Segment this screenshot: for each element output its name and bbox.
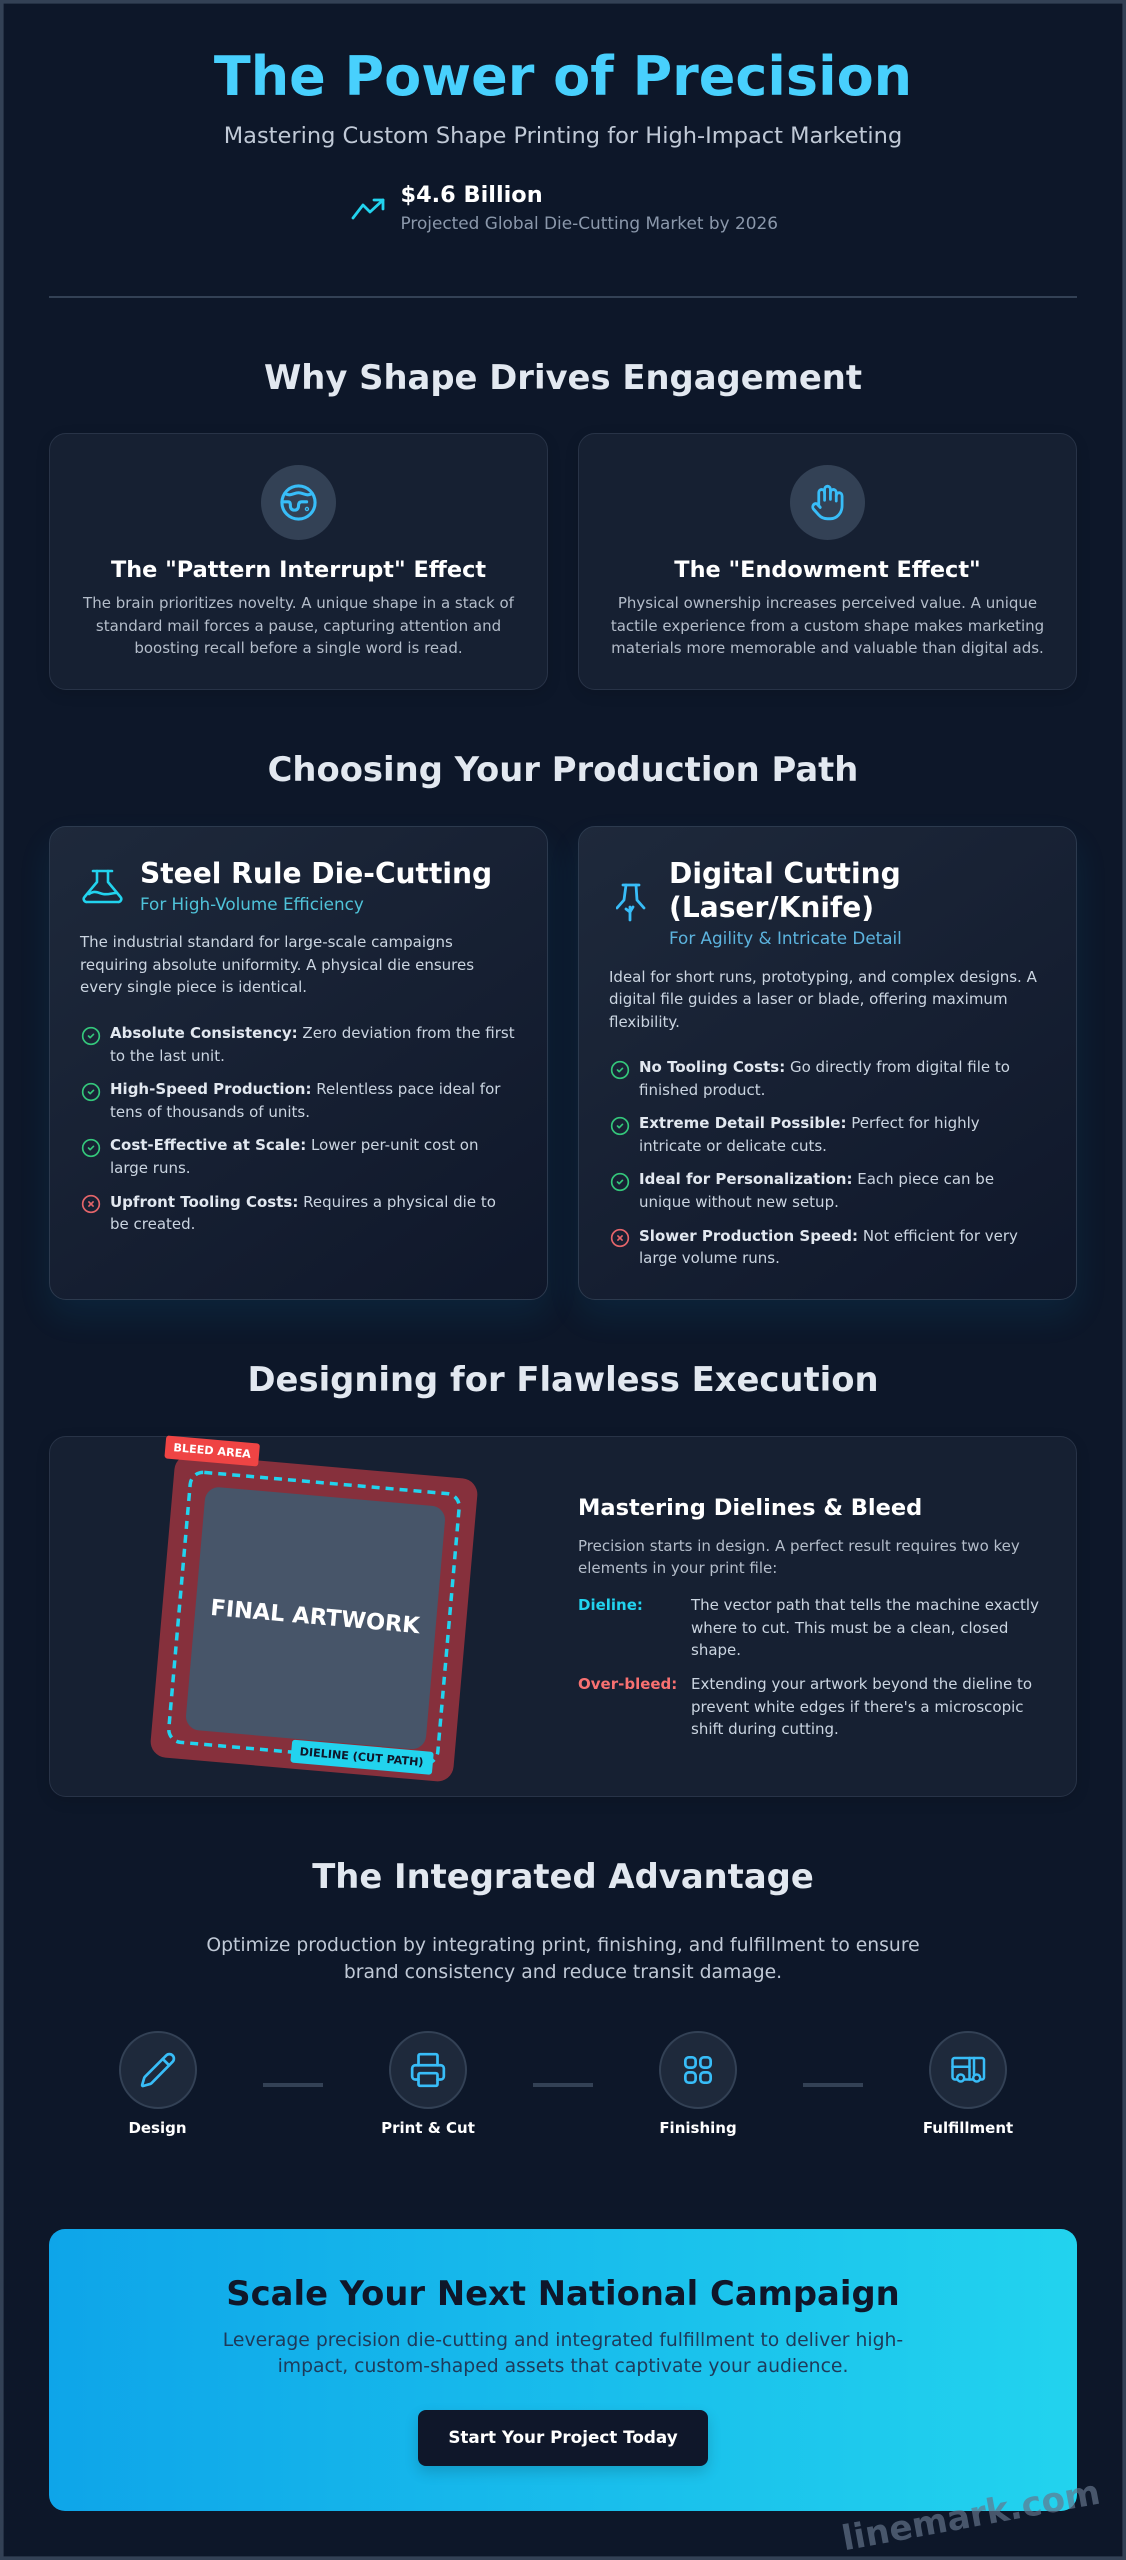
icon: check [82, 1082, 100, 1102]
card subtitle: For High-Volume Efficiency [140, 894, 364, 914]
item text: Upfront Tooling Costs: Requires a physical die to [110, 1193, 496, 1211]
cta text: impact, custom-shaped assets that captivate your audience. [278, 2356, 848, 2377]
icon: cross [610, 1228, 630, 1248]
dieline dashed path [167, 1470, 461, 1764]
item text: large runs. [110, 1159, 191, 1177]
label: Print & Cut [381, 2119, 475, 2137]
list item [610, 1058, 1010, 1098]
step: fulfillment [929, 2031, 1007, 2109]
card title: Digital Cutting [669, 857, 901, 890]
card title: The "Endowment Effect" [674, 557, 981, 583]
intro text [578, 1536, 1020, 1577]
icon: truck [949, 2051, 987, 2089]
intro paragraph: Optimize production by integrating print, finishing, and fulfillment to ensure [206, 1935, 920, 1956]
list item [610, 1114, 980, 1155]
icon: trending up [352, 198, 384, 220]
card description: requiring absolute uniformity. A physical die ensures [80, 956, 474, 974]
item text: Cost-Effective at Scale: Lower per-unit cost on [110, 1136, 478, 1154]
connector [533, 2083, 593, 2087]
market stat [352, 182, 778, 232]
panel: endowment effect [578, 433, 1077, 690]
cta button: Start Your Project Today [448, 2427, 678, 2447]
icon: check [82, 1026, 100, 1046]
item text [110, 1024, 515, 1064]
final artwork area [185, 1486, 446, 1750]
definition: dieline: The vector path that tells the machine exactly [691, 1596, 1039, 1614]
item text: be created. [110, 1215, 195, 1233]
bleed label [164, 1435, 260, 1466]
card description: The brain prioritizes novelty. A unique shape in a stack of [83, 594, 514, 612]
label: Design [128, 2119, 187, 2137]
stat caption: Projected Global Die-Cutting Market by 2026 [400, 212, 778, 232]
card title: (Laser/Knife) [669, 890, 874, 924]
card description [611, 594, 1044, 657]
step: design [118, 2031, 196, 2109]
intro paragraph [206, 1935, 920, 1982]
list item [82, 1193, 496, 1233]
list item [82, 1024, 515, 1064]
item text [639, 1114, 980, 1155]
icon: check [610, 1060, 630, 1080]
artwork label: FINAL ARTWORK [209, 1594, 421, 1639]
term: dieline: Dieline: [578, 1596, 643, 1614]
item text [639, 1058, 1010, 1098]
item text: Slower Production Speed: Not efficient for very [639, 1227, 1018, 1245]
heading: production path: Choosing Your Production Path [268, 750, 858, 789]
item text: Extreme Detail Possible: Perfect for highly [639, 1114, 980, 1132]
panel: pattern interrupt [49, 433, 548, 690]
heading: integrated advantage: The Integrated Advantage [312, 1857, 814, 1896]
card description: The industrial standard for large-scale campaigns [80, 933, 453, 951]
icon: grid [679, 2051, 717, 2089]
icon: laser knife [616, 884, 646, 922]
label: Finishing [659, 2119, 737, 2137]
item text [110, 1080, 500, 1121]
card description: digital file guides a laser or blade, offering maximum [609, 990, 1008, 1008]
card description: Ideal for short runs, prototyping, and complex designs. A [609, 968, 1037, 986]
subtitle: Mastering Custom Shape Printing for High-Impact Marketing [224, 122, 902, 148]
icon: check [82, 1138, 100, 1158]
definition: over-bleed: prevent white edges if there's a microscopic [691, 1698, 1024, 1716]
card description: boosting recall before a single word is read. [134, 639, 463, 657]
diagram: bleed and dieline [149, 1453, 479, 1782]
item text [110, 1193, 496, 1233]
item text: tens of thousands of units. [110, 1103, 310, 1121]
stat value: $4.6 Billion [400, 182, 543, 208]
definition: over-bleed: shift during cutting. [691, 1720, 839, 1738]
watermark: linemark.com [839, 2473, 1103, 2559]
intro paragraph: brand consistency and reduce transit damage. [344, 1962, 782, 1982]
item text [639, 1170, 994, 1211]
item text: Absolute Consistency: Zero deviation from the first [110, 1024, 515, 1042]
card subtitle: For Agility & Intricate Detail [669, 928, 902, 948]
card description: every single piece is identical. [80, 978, 307, 996]
cta text [49, 2328, 1077, 2380]
heading: flawless execution: Designing for Flawless Execution [247, 1360, 879, 1399]
panel: digital cutting [578, 826, 1077, 1300]
item text: Ideal for Personalization: Each piece can be [639, 1170, 994, 1188]
list item [610, 1227, 1018, 1267]
definition: dieline [690, 1596, 1039, 1659]
panel: steel rule die-cutting [49, 826, 548, 1300]
card title: Steel Rule Die-Cutting [140, 857, 492, 890]
title: The Power of Precision [214, 45, 912, 108]
cta text: Leverage precision die-cutting and integrated fulfillment to deliver high- [223, 2330, 903, 2351]
panel: dielines and bleed [49, 1436, 1077, 1797]
subheading: Mastering Dielines & Bleed [578, 1494, 922, 1520]
dieline label: DIELINE (CUT PATH) [299, 1745, 424, 1769]
cta button [418, 2410, 708, 2466]
step: finishing [659, 2031, 737, 2109]
definition: over-bleed [691, 1675, 1032, 1738]
item text: No Tooling Costs: Go directly from digital file to [639, 1058, 1010, 1076]
term: over-bleed: Over-bleed: [578, 1675, 677, 1693]
text: mastering dielines [578, 1494, 1039, 1738]
card description [82, 594, 514, 657]
cta heading: Scale Your Next National Campaign [226, 2274, 900, 2313]
heading: why shape: Why Shape Drives Engagement [264, 358, 862, 397]
card title [669, 857, 901, 924]
call to action panel [49, 2229, 1077, 2511]
dieline label [290, 1739, 433, 1774]
definition: over-bleed: Extending your artwork beyond the dieline to [691, 1675, 1032, 1693]
item text [639, 1227, 1018, 1267]
intro text: Precision starts in design. A perfect result requires two key [578, 1536, 1020, 1554]
list item [82, 1080, 500, 1121]
bleed label: BLEED AREA [173, 1441, 251, 1460]
card description [609, 968, 1037, 1031]
list item [82, 1136, 478, 1177]
icon: pencil [140, 2052, 176, 2088]
card description: flexibility. [609, 1013, 680, 1031]
icon: hand [790, 465, 865, 540]
label: Fulfillment [923, 2119, 1013, 2137]
item text: intricate or delicate cuts. [639, 1137, 827, 1155]
icon: printer [409, 2051, 447, 2089]
step: print and cut [389, 2031, 467, 2109]
icon: flask [82, 870, 123, 904]
item text: High-Speed Production: Relentless pace ideal for [110, 1080, 500, 1098]
card title: The "Pattern Interrupt" Effect [111, 557, 486, 583]
definition: dieline: shape. [691, 1641, 741, 1659]
icon: check [610, 1172, 630, 1192]
item text [110, 1136, 478, 1177]
item text: to the last unit. [110, 1046, 225, 1064]
card description: materials more memorable and valuable than digital ads. [611, 639, 1044, 657]
icon: cross [82, 1194, 100, 1214]
intro text: elements in your print file: [578, 1559, 777, 1577]
item text: large volume runs. [639, 1249, 780, 1267]
card description [80, 933, 474, 996]
icon: check [610, 1116, 630, 1136]
card description: tactile experience from a custom shape makes marketing [611, 617, 1044, 635]
icon: brain wave [261, 465, 336, 540]
card description: standard mail forces a pause, capturing attention and [96, 617, 501, 635]
definition: dieline: where to cut. This must be a clean, closed [691, 1619, 1008, 1637]
list item [610, 1170, 994, 1211]
item text: unique without new setup. [639, 1193, 839, 1211]
connector [803, 2083, 863, 2087]
card description: Physical ownership increases perceived value. A unique [618, 594, 1037, 612]
connector [262, 2083, 322, 2087]
item text: finished product. [639, 1080, 765, 1098]
